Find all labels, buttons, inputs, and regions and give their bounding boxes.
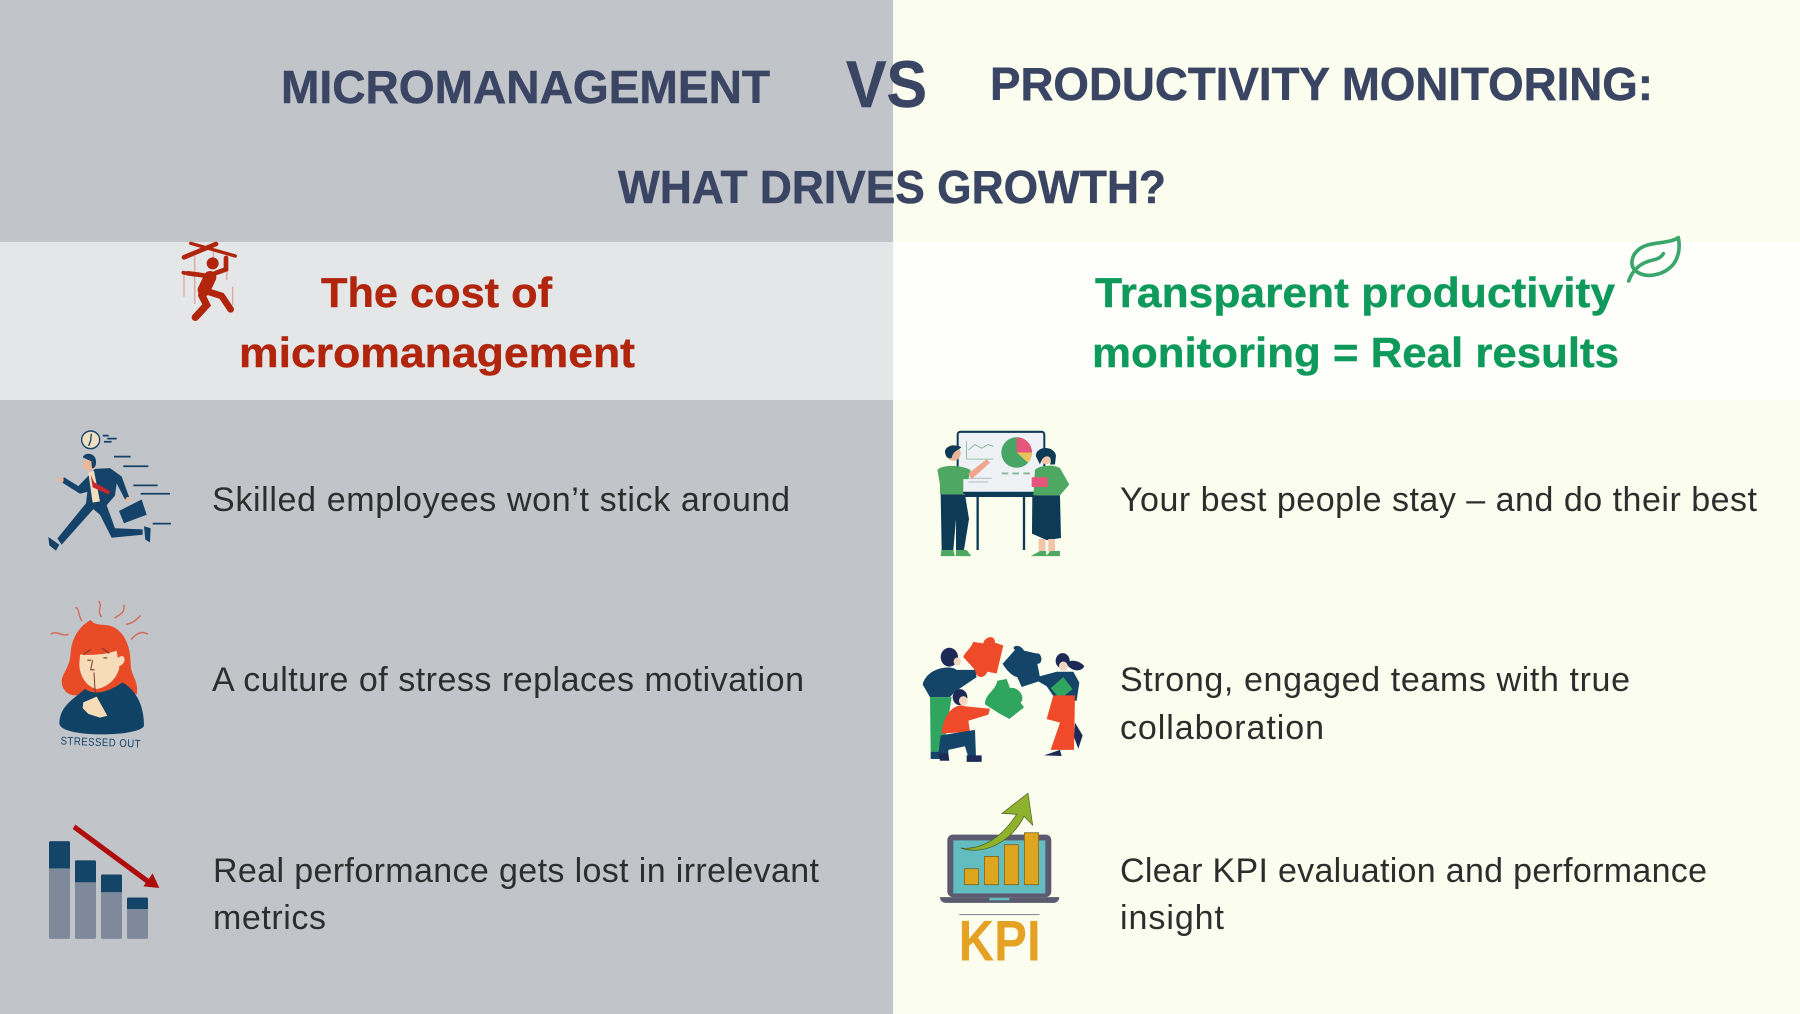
text: real performance [213, 852, 820, 937]
panel: left heading band [0, 242, 893, 400]
icon: puppet [183, 243, 235, 317]
title: WHAT DRIVES GROWTH? [618, 161, 1166, 213]
text: real performance: metrics [213, 899, 326, 937]
icon: declining bar chart [49, 827, 159, 939]
heading: transparent productivity monitoring: monitoring = Real results [1092, 329, 1619, 376]
icon: running businessman [48, 431, 171, 551]
text: strong engaged teams: Strong, engaged teams with true [1120, 661, 1630, 699]
title [281, 47, 1653, 213]
heading: the cost of micromanagement: micromanagement [239, 329, 635, 376]
text: culture of stress: A culture of stress replaces motivation [212, 661, 804, 699]
icon: KPI laptop: KPI [959, 909, 1041, 973]
text: best people stay: Your best people stay – and do their best [1120, 481, 1758, 519]
title: PRODUCTIVITY MONITORING: [990, 58, 1653, 110]
text: clear KPI evaluation: insight [1120, 899, 1225, 937]
text: clear KPI evaluation [1120, 852, 1707, 937]
heading: transparent productivity monitoring: Transparent productivity [1095, 269, 1616, 316]
icon: presentation board [937, 432, 1069, 556]
panel: right heading band [893, 242, 1800, 400]
icon: team with puzzle pieces [923, 637, 1084, 762]
text: strong engaged teams: collaboration [1120, 709, 1324, 747]
text: real performance: Real performance gets lost in irrelevant [213, 852, 820, 890]
text: clear KPI evaluation: Clear KPI evaluation and performance [1120, 852, 1707, 890]
heading: transparent productivity monitoring [1092, 269, 1619, 376]
heading: the cost of micromanagement: The cost of [321, 269, 553, 316]
text: skilled employees: Skilled employees won’t stick around [212, 481, 790, 519]
panel: left background [0, 0, 893, 1014]
icon: stressed woman [51, 601, 148, 751]
icon: leaf [1629, 238, 1679, 281]
icon: KPI laptop [940, 793, 1059, 973]
title: MICROMANAGEMENT [281, 61, 770, 113]
heading: the cost of micromanagement [239, 269, 635, 376]
icon: stressed woman: STRESSED OUT [60, 736, 141, 751]
title: VS [846, 47, 927, 121]
text: strong engaged teams [1120, 661, 1630, 747]
panel: right background [893, 0, 1800, 1014]
